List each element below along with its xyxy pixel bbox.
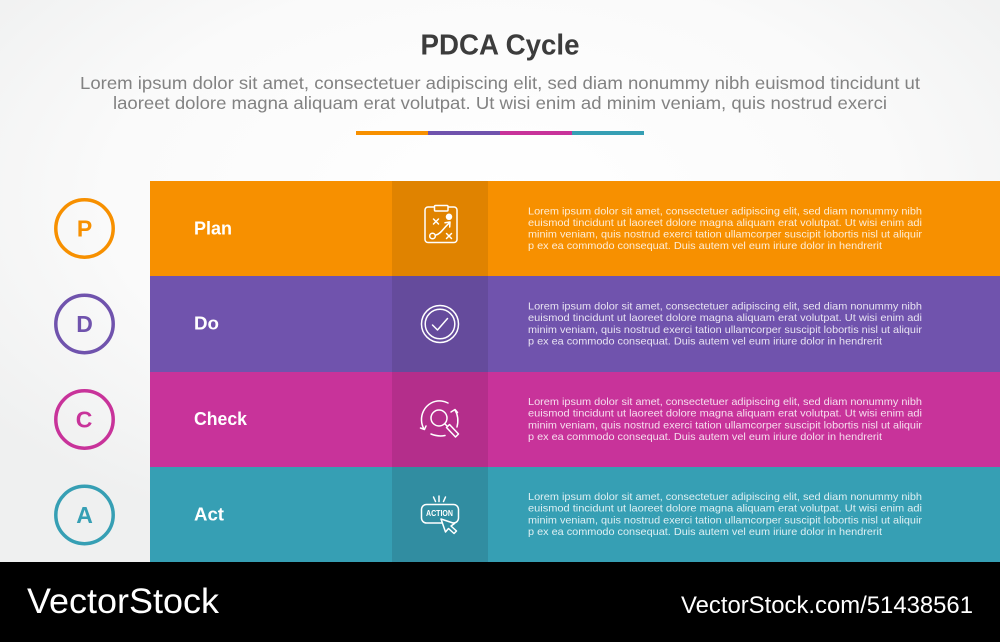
Plan description: p ex ea commodo consequat. Duis autem vel eum iriure dolor in hendrerit <box>528 241 882 252</box>
Do label: Do <box>194 312 219 334</box>
badge: C: C <box>76 406 92 432</box>
Plan description <box>528 206 923 252</box>
icon: action button: ACTION <box>426 509 453 518</box>
Do description: minim veniam, quis nostrud exerci tation ullamcorper suscipit lobortis nisl ut aliquir <box>528 325 923 336</box>
footer bar <box>0 562 1000 642</box>
Check band <box>150 372 1000 467</box>
badge: C <box>56 391 113 448</box>
Check icon column <box>392 372 488 467</box>
Act description: euismod tincidunt ut laoreet dolore magna aliquam erat volutpat. Ut wisi enim adi <box>528 504 922 515</box>
row: Plan <box>150 181 1000 276</box>
Do icon column <box>392 276 488 372</box>
Check description: p ex ea commodo consequat. Duis autem vel eum iriure dolor in hendrerit <box>528 432 882 443</box>
badge: P <box>56 200 113 257</box>
footer image id: VectorStock.com/51438561 <box>681 592 973 619</box>
subtitle: laoreet dolore magna aliquam erat volutpat. Ut wisi enim ad minim veniam, quis nostrud exerci <box>113 93 887 113</box>
Act description: minim veniam, quis nostrud exerci tation ullamcorper suscipit lobortis nisl ut aliquir <box>528 515 923 526</box>
Plan description: Lorem ipsum dolor sit amet, consectetuer adipiscing elit, sed diam nonummy nibh <box>528 206 922 218</box>
row: Do <box>150 276 1000 372</box>
Act label: Act <box>194 504 224 524</box>
subtitle <box>80 73 920 113</box>
Plan icon column <box>392 181 488 276</box>
Do description: euismod tincidunt ut laoreet dolore magna aliquam erat volutpat. Ut wisi enim adi <box>528 313 922 324</box>
footer brand: VectorStock <box>27 582 220 621</box>
Act description: Lorem ipsum dolor sit amet, consectetuer adipiscing elit, sed diam nonummy nibh <box>528 492 922 503</box>
Check description: minim veniam, quis nostrud exerci tation ullamcorper suscipit lobortis nisl ut aliquir <box>528 420 923 431</box>
Plan description: minim veniam, quis nostrud exerci tation ullamcorper suscipit lobortis nisl ut aliquir <box>528 230 923 241</box>
Act band <box>150 467 1000 562</box>
icon: clipboard plan <box>425 206 457 242</box>
icon: check circle <box>422 306 458 342</box>
icon: action button <box>422 496 458 534</box>
Check description: euismod tincidunt ut laoreet dolore magna aliquam erat volutpat. Ut wisi enim adi <box>528 409 922 420</box>
badge: D: D <box>76 311 93 337</box>
Act description <box>528 492 923 538</box>
Do description: p ex ea commodo consequat. Duis autem vel eum iriure dolor in hendrerit <box>528 336 882 347</box>
row: Check <box>150 372 1000 467</box>
Plan band <box>150 181 1000 276</box>
title underline <box>356 131 644 135</box>
subtitle: Lorem ipsum dolor sit amet, consectetuer adipiscing elit, sed diam nonummy nibh euismod tincidunt ut <box>80 73 920 93</box>
Check label: Check <box>194 408 248 429</box>
badge: D <box>56 295 113 353</box>
row: Act <box>150 467 1000 562</box>
badge: P: P <box>77 216 92 242</box>
title: PDCA Cycle <box>420 30 580 62</box>
badge: A: A <box>76 502 93 528</box>
Plan label: Plan <box>194 218 232 238</box>
Act icon column <box>392 467 488 562</box>
Do band <box>150 276 1000 372</box>
Do description: Lorem ipsum dolor sit amet, consectetuer adipiscing elit, sed diam nonummy nibh <box>528 302 922 313</box>
badge: A <box>56 486 113 544</box>
Do description <box>528 302 923 347</box>
Check description <box>528 397 923 443</box>
Act description: p ex ea commodo consequat. Duis autem vel eum iriure dolor in hendrerit <box>528 527 882 538</box>
Check description: Lorem ipsum dolor sit amet, consectetuer adipiscing elit, sed diam nonummy nibh <box>528 397 922 408</box>
icon: magnifier cycle <box>420 401 458 437</box>
Plan description: euismod tincidunt ut laoreet dolore magna aliquam erat volutpat. Ut wisi enim adi <box>528 218 922 229</box>
